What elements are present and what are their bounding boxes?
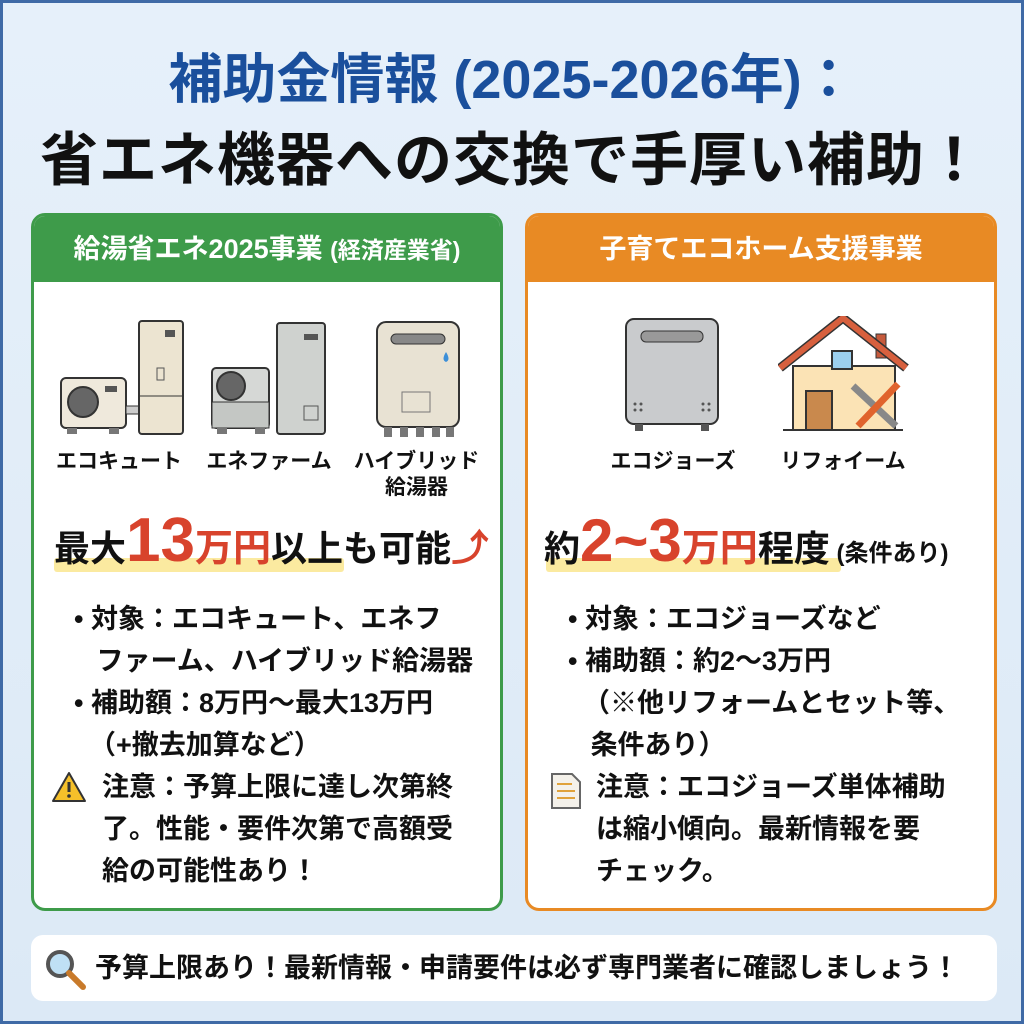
icon: ene farm	[211, 322, 326, 435]
caution text: チェック。	[596, 856, 729, 886]
icon: eco jozu	[625, 318, 719, 431]
caution text: 了。性能・要件次第で高額受	[102, 814, 453, 844]
bottom note bar	[31, 935, 997, 1001]
title line 1: 補助金情報 (2025-2026年)：	[168, 50, 856, 110]
icon: magnifier	[46, 950, 86, 990]
headline amount: 約2~3万円程度 (条件あり)	[544, 507, 948, 574]
panel: 給湯省エネ2025事業	[31, 213, 503, 911]
caution text	[596, 772, 946, 886]
bullet list: • 補助額：約2〜3万円	[568, 646, 831, 676]
bullet list: 条件あり）	[590, 730, 726, 760]
caution text: 給の可能性あり！	[102, 856, 318, 886]
panel header: orange	[528, 216, 994, 282]
icon: warning	[52, 772, 86, 802]
panel: 子育てエコホーム支援事業	[525, 213, 997, 911]
icon: memo	[551, 773, 581, 809]
bullet list: • 対象：エコジョーズなど	[568, 604, 881, 634]
label: ハイブリッド給湯器: 給湯器	[385, 476, 448, 499]
bullet list	[74, 604, 473, 760]
icon: eco cute	[60, 320, 184, 435]
panel header: green	[34, 216, 500, 282]
icon: hybrid water heater	[376, 321, 460, 437]
icon: house with tools	[778, 316, 909, 431]
caution text: 注意：エコジョーズ単体補助	[596, 772, 946, 802]
label: ハイブリッド給湯器: ハイブリッド	[354, 450, 479, 473]
bullet list: • 補助額：8万円〜最大13万円	[74, 688, 433, 718]
caution text	[102, 772, 453, 886]
note text: 予算上限あり！最新情報・申請要件は必ず専門業者に確認しましょう！	[95, 953, 959, 983]
caution text: は縮小傾向。最新情報を要	[596, 814, 920, 844]
panel header: orange: 子育てエコホーム支援事業	[599, 234, 923, 264]
bullet list: • 対象：エコキュート、エネフ	[74, 604, 441, 634]
title line 2: 省エネ機器への交換で手厚い補助！	[40, 128, 984, 193]
bullet list: （+撤去加算など）	[89, 730, 321, 760]
bullet list: （※他リフォームとセット等、	[583, 688, 960, 718]
headline amount: 最大13万円以上も可能⤴	[54, 506, 489, 575]
label: リフォイーム: リフォイーム	[780, 450, 906, 473]
label: ハイブリッド給湯器	[354, 450, 479, 499]
label: エコジョーズ: エコジョーズ	[611, 450, 735, 473]
label: エコキュート: エコキュート	[56, 450, 182, 473]
caution text: 注意：予算上限に達し次第終	[102, 772, 453, 802]
panel header: green: 給湯省エネ2025事業 (経済産業省)	[74, 234, 460, 264]
bullet list	[568, 604, 960, 760]
bullet list: ファーム、ハイブリッド給湯器	[96, 646, 473, 676]
label: エネファーム: エネファーム	[206, 450, 332, 473]
